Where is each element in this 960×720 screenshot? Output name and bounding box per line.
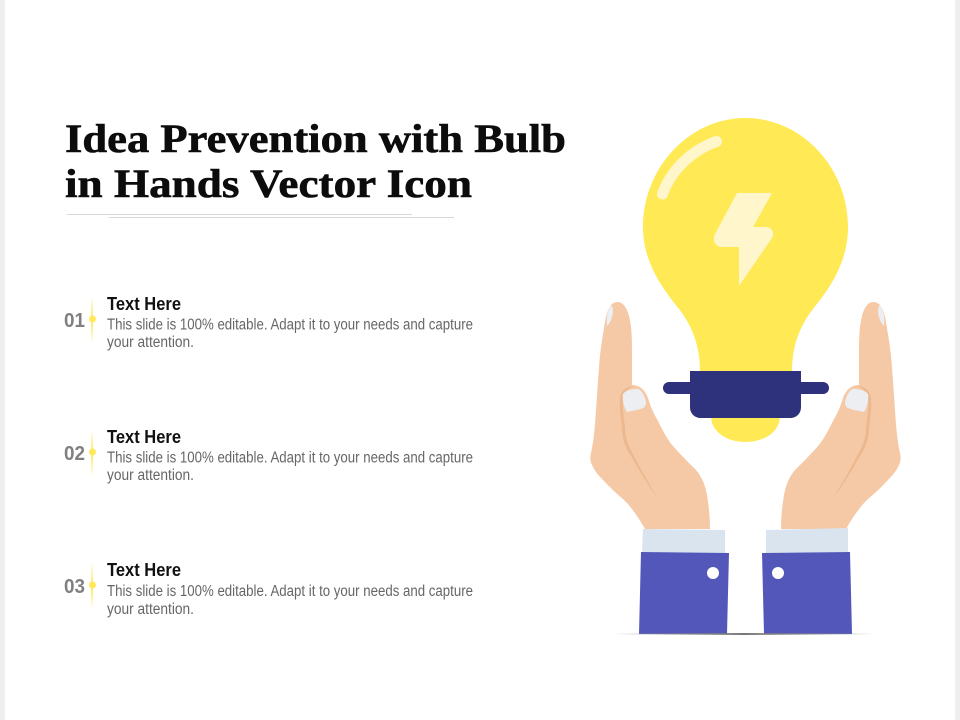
thumb nail bbox=[845, 389, 868, 412]
number 03: 03 bbox=[64, 576, 85, 598]
description 01 bbox=[107, 316, 473, 351]
icon: light bulb bbox=[643, 118, 848, 442]
icon: right hand bbox=[762, 302, 901, 634]
list item 01 bbox=[64, 293, 473, 351]
bulb glass bbox=[643, 118, 848, 372]
button bbox=[707, 567, 719, 579]
title bbox=[65, 116, 566, 206]
shirt cuff bbox=[766, 528, 848, 553]
marker 01 bbox=[89, 296, 96, 344]
marker 03 bbox=[89, 562, 96, 610]
lightning bolt bbox=[714, 193, 773, 286]
heading 01: Text Here bbox=[107, 293, 181, 314]
marker 02 bbox=[89, 429, 96, 477]
shirt cuff bbox=[642, 529, 725, 553]
jacket sleeve bbox=[639, 552, 729, 634]
palm and fingers bbox=[781, 302, 901, 529]
finger nail bbox=[607, 305, 613, 326]
button bbox=[772, 567, 784, 579]
list item 03 bbox=[64, 559, 473, 618]
finger nail bbox=[878, 305, 884, 326]
heading 03: Text Here bbox=[107, 559, 181, 580]
thumb crease bbox=[620, 386, 658, 498]
description 02: This slide is 100% editable. Adapt it to your needs and capture bbox=[107, 450, 473, 466]
thumb nail bbox=[623, 389, 646, 412]
palm and fingers bbox=[590, 302, 710, 529]
bulb base bbox=[690, 371, 801, 418]
title: Idea Prevention with Bulb bbox=[65, 116, 566, 161]
description 03: your attention. bbox=[107, 601, 194, 618]
base bar bbox=[663, 382, 829, 394]
jacket sleeve bbox=[762, 552, 852, 634]
description 02: your attention. bbox=[107, 467, 194, 484]
description 01: This slide is 100% editable. Adapt it to your needs and capture bbox=[107, 316, 473, 334]
number 01: 01 bbox=[64, 310, 85, 332]
number 02: 02 bbox=[64, 443, 85, 465]
ground shadow bbox=[612, 633, 876, 635]
thumb crease bbox=[833, 386, 871, 498]
description 03 bbox=[107, 583, 473, 618]
list item 02 bbox=[64, 426, 473, 484]
title: in Hands Vector Icon bbox=[65, 161, 472, 206]
bulb tip bbox=[711, 416, 780, 442]
description 01: your attention. bbox=[107, 334, 194, 351]
icon: left hand bbox=[590, 302, 729, 634]
highlight bbox=[662, 142, 716, 194]
description 02 bbox=[107, 450, 473, 484]
description 03: This slide is 100% editable. Adapt it to your needs and capture bbox=[107, 583, 473, 600]
heading 02: Text Here bbox=[107, 426, 181, 447]
